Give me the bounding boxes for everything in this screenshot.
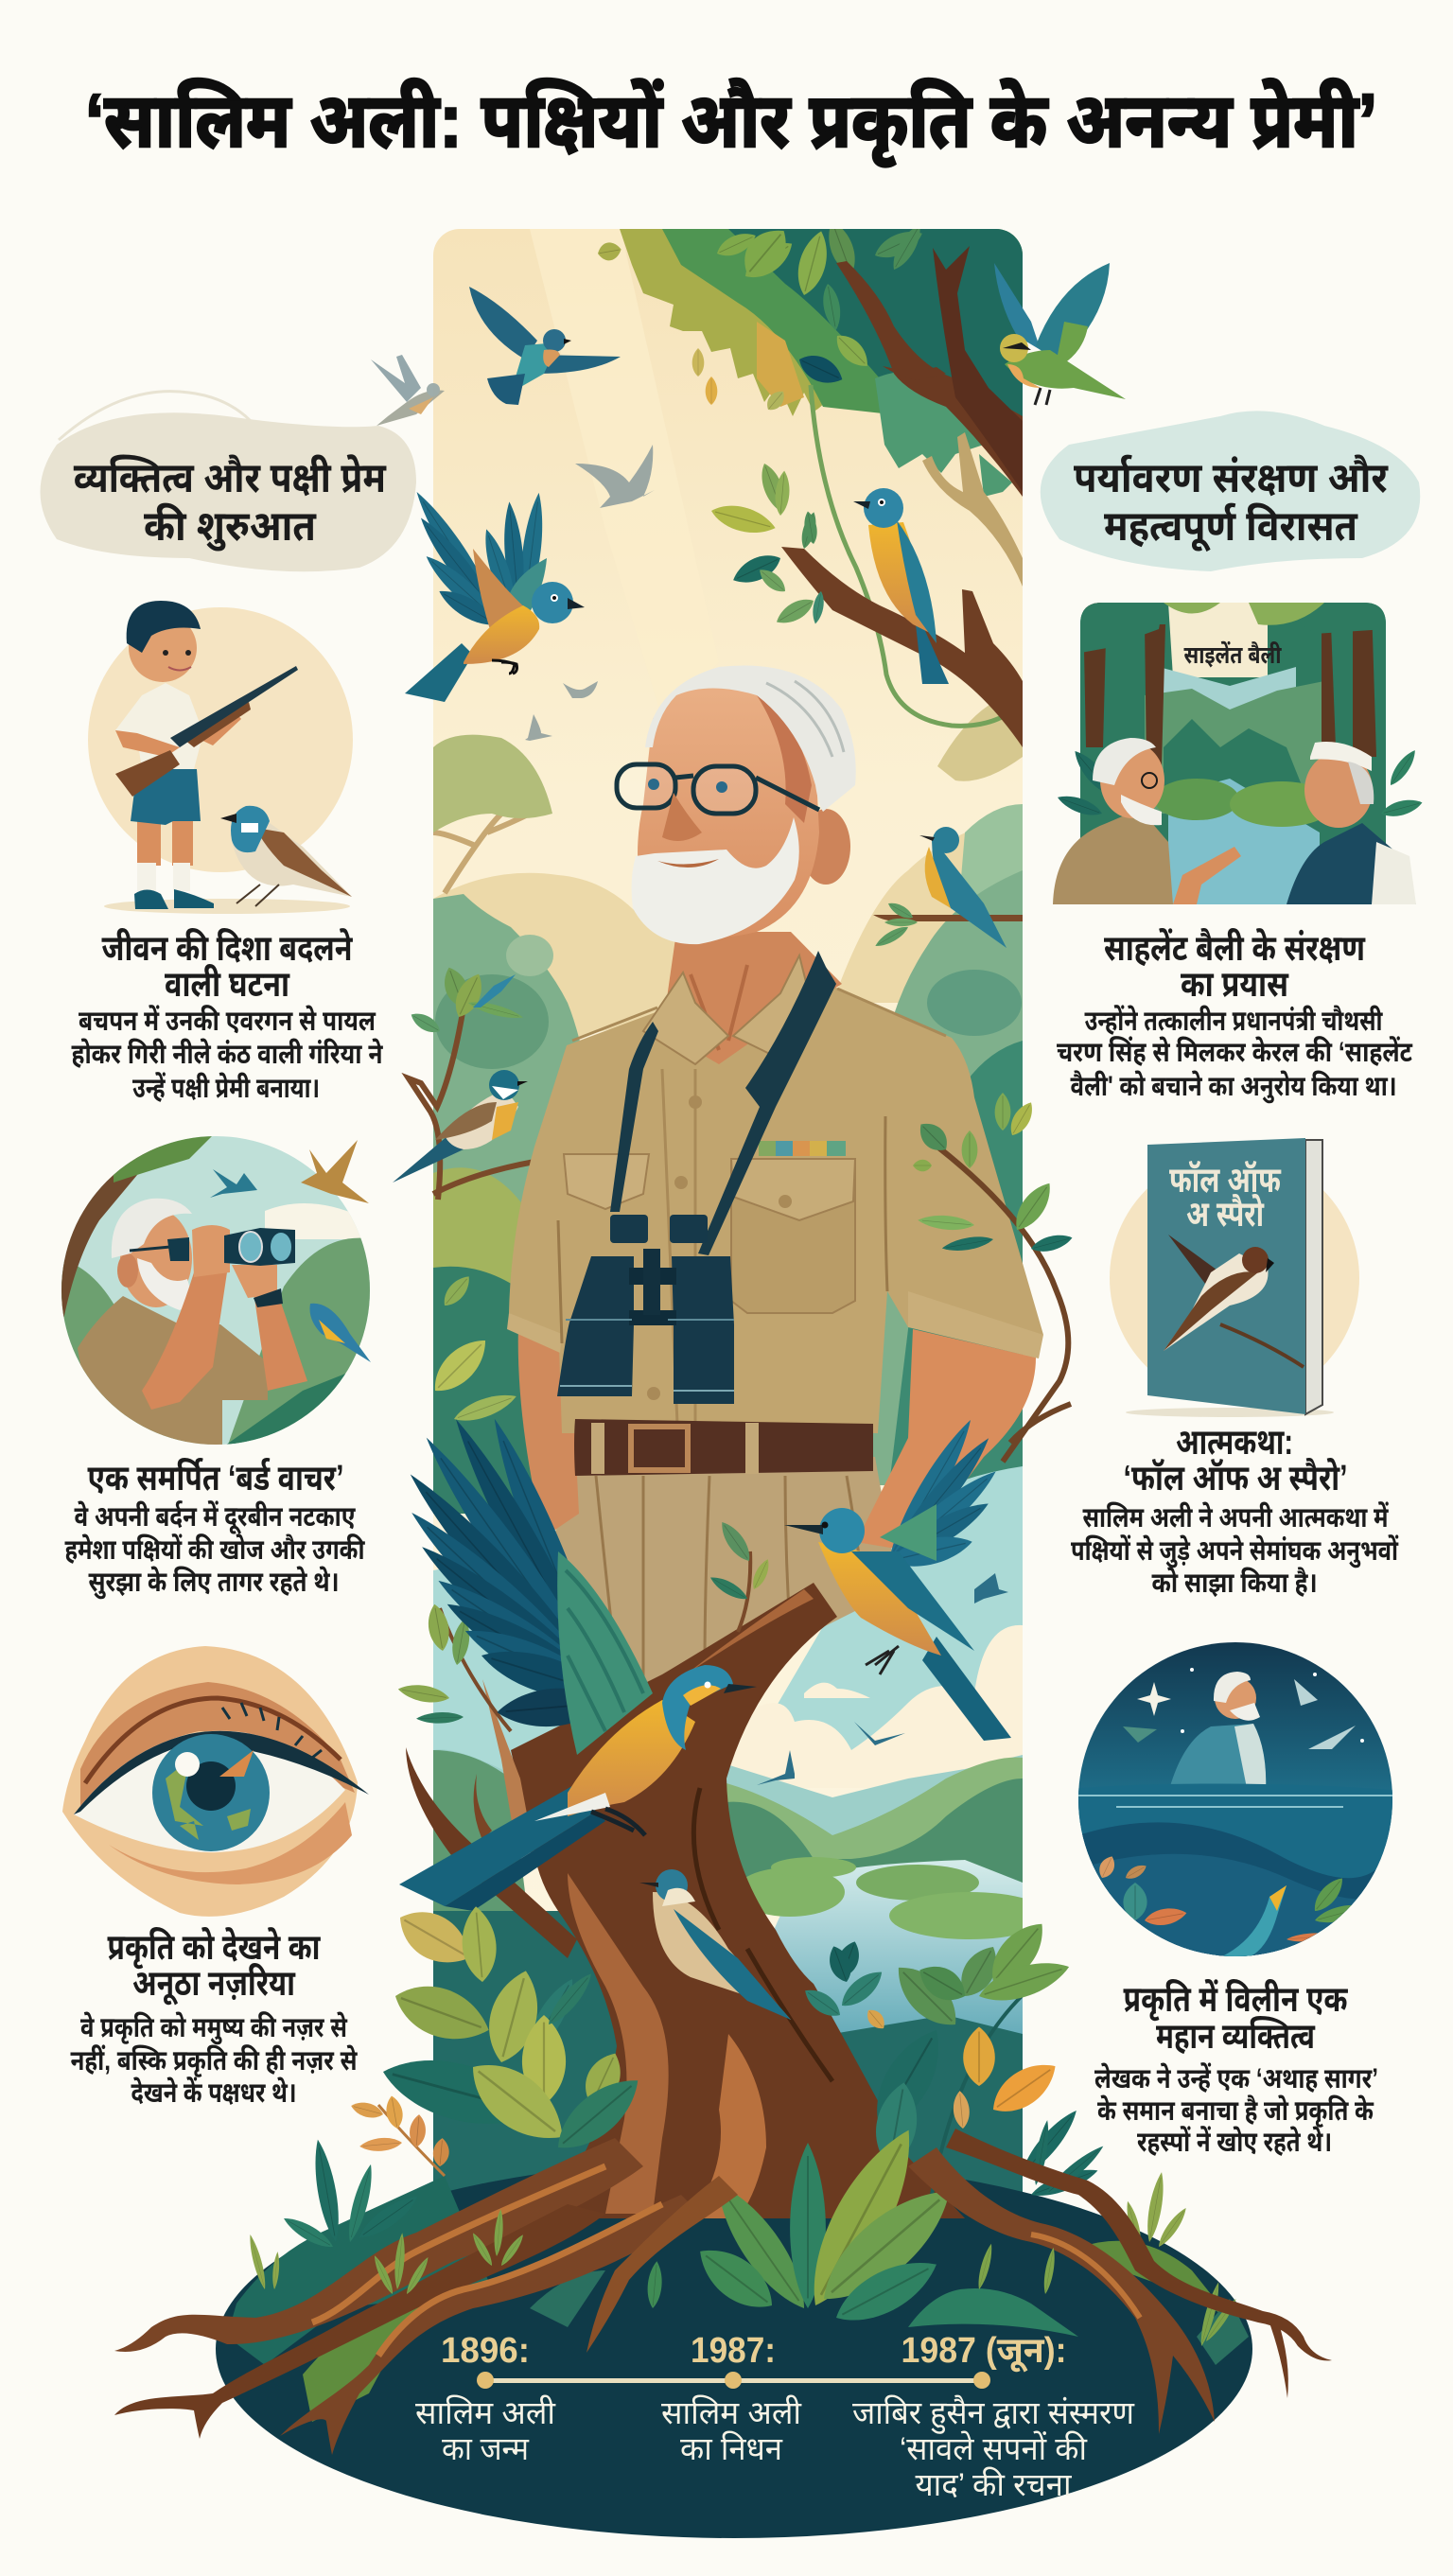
left section heading: व्यक्तित्व और पक्षी प्रेम [73,453,387,501]
far hills [435,1750,1023,1835]
panel: autobiography [1071,1138,1399,1599]
heading [1124,1423,1347,1498]
pants [555,1457,899,1703]
small bird on left branch [473,974,516,1008]
body text: वे प्रकृति को ममुष्य की नज़र से [80,2010,348,2045]
main tree branch [836,261,1023,497]
timeline entry 1896: का जन्म [442,2431,530,2467]
illustration: boy and sparrow [88,601,353,914]
right section heading: महत्वपूर्ण विरासत [1104,502,1358,552]
timeline dot 1 [477,2372,494,2389]
body text: को साझा किया है। [1152,1566,1317,1599]
beige branch [922,432,1023,587]
heading: ‘फॉल ऑफ अ स्पैरो’ [1124,1457,1347,1498]
timeline entry 1896: 1896: [441,2331,530,2371]
shirt [509,984,1043,1433]
bird: grey left flying [371,355,445,426]
timeline entry 1896 [415,2331,556,2467]
timeline dot 2 [725,2372,742,2389]
bird: perched blue and yellow [853,488,949,684]
timeline entry 1987 June: याद’ की रचना [916,2466,1073,2503]
tree trunk [406,1583,965,2218]
right section heading [1041,411,1420,571]
foreground dark [433,1911,1023,2192]
man left [1053,809,1173,904]
panel: silent valley [1053,603,1424,1104]
ear [801,809,850,885]
timeline entry 1987 June: ‘सावले सपनों की [900,2430,1088,2467]
tail [399,1783,596,1906]
root left 3 [280,2195,700,2455]
small silhouettes in sky [757,1573,1008,1785]
body text: उन्हें पक्षी प्रेमी बनाया। [132,1071,320,1104]
body text: उन्होंने तत्कालीन प्रधानपंत्री चौथसी [1084,1004,1383,1037]
panel: childhood event [72,601,383,1104]
timeline line [485,2378,981,2383]
figure [1171,1724,1266,1784]
branch with perched bird [709,461,1023,747]
right section heading: पर्यावरण संरक्षण और [1074,454,1389,501]
root right 1 [946,2129,1332,2360]
heading [102,927,353,1005]
root left 1 [114,2138,643,2352]
waves [1078,1783,1392,1957]
bird: small on trunk [639,1869,791,2020]
lower canopy blob [875,371,984,473]
binoculars [167,1237,189,1261]
sky and clouds lower [433,1466,1023,1788]
bird: grey silhouette [575,445,655,508]
distant trees [433,706,1023,895]
roots [114,2129,1332,2455]
shorts [131,769,201,825]
heading [1104,927,1366,1005]
arms [142,1272,227,1410]
canopy leaves [717,234,756,255]
heading: एक समर्पित ‘बर्ड वाचर’ [87,1457,344,1498]
left sprig over panel edge [396,1603,511,1731]
upper left pale branch [482,1679,534,1854]
heading: साहलेंट बैली के संरक्षण [1104,927,1366,969]
neck [662,932,842,1064]
bird and branch: right small [873,827,1023,951]
arm left [518,1324,579,1537]
man right [1287,823,1416,904]
ocean plants [1099,1856,1114,1878]
heading: प्रकृति में विलीन एक [1124,1978,1349,2022]
wrist band [254,1288,283,1307]
body text [1094,2061,1378,2158]
panel: central illustration [425,229,1050,2234]
ground greenery [227,2176,1249,2422]
rifle [115,750,180,797]
mid foliage right [873,870,1023,1485]
small birds [525,681,598,741]
mid foliage left [433,894,580,1202]
heading [108,1926,321,2006]
lower left branch [406,1747,577,1958]
heading: प्रकृति को देखने का [108,1926,321,1970]
bird small [210,1169,257,1198]
collar [643,955,814,1064]
illustration: book [1110,1138,1359,1417]
heading: का प्रयास [1181,965,1289,1005]
bird: large foreground [398,1412,757,1911]
foreground plants left [376,1899,651,2163]
illustration: man with binoculars [57,1130,378,1452]
head [129,614,197,682]
side foliage [1069,746,1117,799]
light rays [530,229,651,363]
tree canopy top right [596,218,1023,587]
timeline entry 1987 June [852,2331,1135,2503]
body text: होकर गिरी नीले कंठ वाली गंरिया ने [72,1037,383,1070]
body text [1071,1500,1399,1599]
belt [574,1419,873,1476]
body text: वे अपनी बर्दन में दूरबीन नटकाए [74,1499,356,1534]
timeline entry 1987 June: जाबिर हुसैन द्वारा संस्मरण [852,2394,1135,2434]
bird perched [310,1304,371,1362]
panel: bird watcher [57,1130,378,1600]
body text: नहीं, बस्कि प्रकृति की ही नज़र से [70,2043,358,2078]
bird: teal flying top [469,287,621,405]
left section heading [40,392,416,571]
timeline entry 1987: सालिम अली [661,2395,802,2431]
face [638,677,819,938]
body text [70,2010,358,2109]
wing feathers [398,1412,620,1731]
timeline [415,2331,1135,2503]
central big leaves [646,2117,967,2336]
body text: रहस्पों नें खोए रहते थे। [1137,2125,1332,2158]
river [775,1860,1023,2034]
strap [698,951,836,1255]
body text: देखने कें पक्षधर थे। [131,2076,297,2109]
heading: वाली घटना [165,963,290,1005]
timeline entry 1987 [661,2331,802,2467]
right pocket [731,1159,855,1313]
timeline entry 1987: 1987: [691,2331,776,2371]
distant beige hills [433,832,965,1037]
nose [662,793,702,841]
hands [192,1225,277,1298]
sprig on trunk [708,1517,773,1632]
body text: लेखक ने उन्हें एक ‘अथाह सागर’ [1094,2061,1378,2094]
heading: आत्मकथा: [1176,1423,1293,1463]
man: full figure [507,665,1043,1703]
vine [811,385,1021,726]
illustration: book: फॉल ऑफ [1169,1160,1282,1200]
bird: green top right [994,263,1126,405]
timeline dot 3 [973,2372,990,2389]
body text [1057,1004,1413,1104]
root right 2 [908,2147,1215,2434]
body text: हमेशा पक्षियों की खोज और उगकी [64,1533,365,1566]
timeline entry 1987 June: 1987 (जून): [901,2331,1067,2373]
dome edge plants [246,2119,1239,2347]
small ground plants [371,2209,1058,2296]
bird: big blue and orange left [405,487,585,702]
bird top [301,1140,369,1203]
illustration: man in ocean [1078,1641,1392,1957]
book sparrow [1168,1235,1220,1291]
glasses [617,764,819,814]
binoculars [557,1215,734,1404]
body text [64,1499,365,1600]
panel: merged with nature [1078,1641,1392,2158]
shirt [115,683,203,769]
heading [1124,1978,1349,2057]
arms [115,730,180,757]
timeline entry 1987: का निधन [680,2431,783,2467]
timeline entry 1896: सालिम अली [415,2395,556,2431]
green hills and forest [726,1758,1023,1859]
heading: महान व्यक्तित्व [1156,2015,1316,2057]
medal ribbons [759,1141,846,1156]
heading: अनूठा नज़रिया [132,1962,296,2006]
ground dome [216,2160,1252,2538]
beard [632,817,799,944]
illustration: silent valley scene [1053,603,1424,904]
scene label: साइलेंत बैली [1184,640,1283,669]
body text: बचपन में उनकी एवरगन से पायल [79,1004,376,1037]
body text: सुरझा के लिए तागर रहते थे। [89,1565,339,1600]
hair [645,665,856,812]
heading: जीवन की दिशा बदलने [102,927,353,969]
arm right [856,1329,1036,1551]
root left 4 [586,2176,738,2353]
left section heading: की शुरुआत [144,502,317,552]
legs [137,818,193,866]
panel background sky [433,229,1023,1928]
bird and branch: left chickadee [393,964,534,1200]
left pocket [564,1154,649,1209]
head [120,1209,192,1307]
eyes [648,779,659,790]
body text: के समान बनाचा है जो प्रकृति के [1097,2094,1374,2129]
right vine with leaves [913,1093,1074,1462]
bird: right on trunk [784,1414,1011,1741]
illustration: eye [62,1646,369,1917]
foreground plants right [800,1913,1100,2202]
sparrow [232,821,352,897]
illustration: book: अ स्पैरो [1186,1193,1265,1235]
root left 2 [114,2204,605,2439]
cloud shapes [726,1625,1023,1788]
orange sprig left [349,2094,450,2176]
shirt [78,1296,268,1447]
body text [72,1004,383,1104]
panel: unique perspective [62,1646,369,2109]
